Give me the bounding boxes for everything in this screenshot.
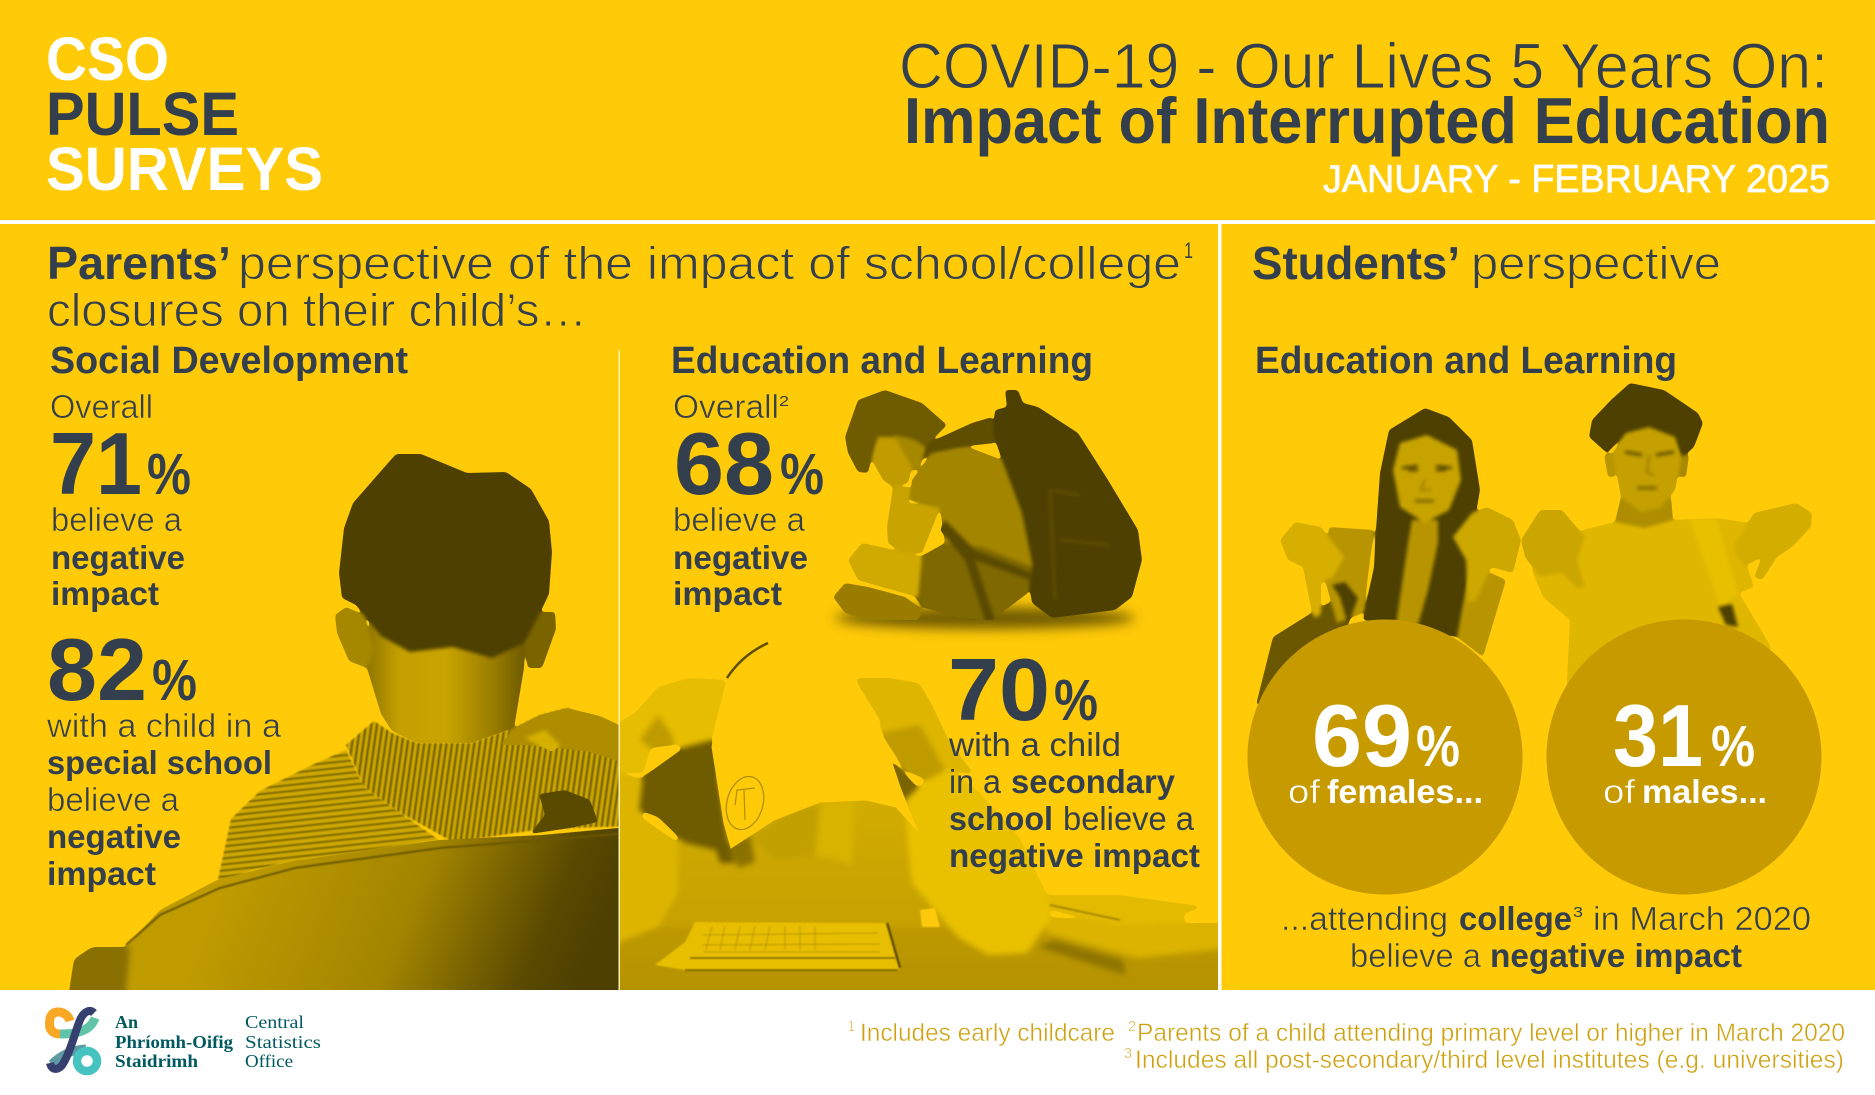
photo: female student with thumbs down [1256,408,1521,705]
stat: 82 percent special school: believe a [47,781,180,818]
stat: 69 percent of females [1288,686,1483,810]
stat: 69 percent of females: % [1416,714,1460,779]
heading: parents perspective: 1 [1184,238,1193,263]
brand heading: CSO Pulse Surveys [46,25,323,203]
stat: 71 percent overall: % [147,442,191,507]
stat: 68 percent overall: believe a [673,501,806,538]
stat: 71 percent overall: Overall [50,388,153,425]
stat: 70 percent secondary school: 70 [948,640,1050,739]
stat: 70 percent secondary school: % [1054,668,1098,733]
stat: 68 percent overall: % [780,442,824,507]
stat: 68 percent overall: 2 [779,393,789,410]
stat: 31 percent of males: % [1711,714,1755,779]
stat: 69 percent of females: of [1288,773,1321,810]
footnotes: 2 [1128,1018,1136,1035]
subheading: education and learning: Education and Learning [671,340,1093,382]
photo: child with backpack, hiding face [833,390,1142,629]
stat: 31 percent of males: of [1603,773,1636,810]
brand heading: CSO Pulse Surveys: PULSE [46,80,239,148]
stat: 71 percent overall: impact [51,575,159,612]
column: education and learning, parents [671,340,1200,874]
heading: students perspective: Students’ [1252,237,1460,289]
title: COVID-19 - Our Lives 5 Years On: [899,30,1828,102]
stat: 68 percent overall: Overall [673,388,779,425]
heading: students perspective: perspective [1471,237,1721,289]
divider: white vertical [1218,224,1222,990]
footer band [0,990,1875,1095]
brand heading: CSO Pulse Surveys: CSO [46,25,169,93]
divider: thin vertical [618,350,620,990]
footnotes: Includes early childcare [860,1019,1115,1047]
heading: students perspective [1252,237,1721,289]
stat: 68 percent overall: 68 [674,414,774,513]
photo: boy seen from behind [67,454,640,1005]
stat: 71 percent overall: 71 [50,414,142,513]
footnotes [848,1018,1845,1074]
stat: 70 percent secondary school: school [949,800,1053,837]
stat: 71 percent overall: believe a [51,501,183,538]
stat: 70 percent secondary school: believe a [1063,800,1195,837]
title: JANUARY - FEBRUARY 2025 [1323,158,1830,201]
divider: white horizontal [0,220,1875,224]
stat: 82 percent special school: with a child in a [46,707,282,744]
heading: parents perspective: Parents’ [47,237,231,289]
heading: parents perspective: closures on their child’s… [47,284,587,336]
stat: 69 percent of females: females... [1327,773,1483,810]
photo: child with paper over head at desk [620,642,1218,990]
text: English name [245,1012,321,1071]
stat: 69 percent of females: 69 [1312,686,1412,785]
text: Irish name: Phríomh-Oifig [115,1032,233,1052]
heading: parents perspective [47,237,1193,336]
stat: 68 percent overall: impact [673,575,782,612]
subheading: education and learning: Education and Learning [1255,340,1677,382]
stat: 82 percent special school: 82 [47,620,147,719]
stat: 70 percent secondary school [948,640,1200,874]
footnotes: Parents of a child attending primary level or higher in March 2020 [1137,1019,1845,1047]
circle: males [1546,620,1822,894]
heading: parents perspective: perspective of the impact of school/college [238,237,1181,289]
text: Irish name: Staidrimh [115,1051,198,1071]
stat: 70 percent secondary school: secondary [1011,763,1176,800]
subheading: social development: Social Development [50,340,408,382]
text: English name: Office [245,1051,293,1071]
text: English name: Central [245,1012,304,1032]
footnotes: 1 [848,1018,855,1035]
caption: attending college: believe a [1350,937,1482,974]
icon: logo knot [50,1011,97,1071]
title [899,30,1830,201]
stat: 82 percent special school: special school [47,744,272,781]
column: social development [46,340,408,892]
stat: 82 percent special school: negative [47,818,181,855]
caption: attending college: 3 [1573,904,1583,921]
stat: 68 percent overall: negative [673,539,808,576]
brand heading: CSO Pulse Surveys: SURVEYS [46,135,323,203]
stat: 70 percent secondary school: negative impact [949,837,1200,874]
stat: 70 percent secondary school: with a child [948,726,1121,763]
title: Impact of Interrupted Education [904,84,1830,157]
stat: 71 percent overall: negative [51,539,185,576]
stat: 31 percent of males: 31 [1613,686,1703,785]
text: English name: Statistics [245,1032,321,1052]
stat: 70 percent secondary school: in a [949,763,1002,800]
stat: 31 percent of males: males... [1642,773,1767,810]
stat: 71 percent overall [50,388,191,612]
caption: attending college [1281,900,1811,974]
stat: 82 percent special school [46,620,282,892]
stat: 68 percent overall [673,388,824,612]
footnotes: 3 [1124,1045,1132,1062]
column: education and learning, students [1255,340,1811,974]
stat: 82 percent special school: % [152,648,197,713]
logo: CSO mark and name [50,1011,321,1071]
footnotes: Includes all post-secondary/third level institutes (e.g. universities) [1135,1046,1844,1074]
text: Irish name [115,1012,233,1071]
text: Irish name: An [115,1012,138,1032]
stat: 82 percent special school: impact [47,855,156,892]
photo: male student with thumbs down [1521,383,1812,700]
caption: attending college: ...attending [1281,900,1448,937]
caption: attending college: in March 2020 [1593,900,1811,937]
caption: attending college: college [1459,900,1572,937]
stat: 31 percent of males [1603,686,1767,810]
caption: attending college: negative impact [1490,937,1742,974]
circle: females [1248,620,1522,894]
